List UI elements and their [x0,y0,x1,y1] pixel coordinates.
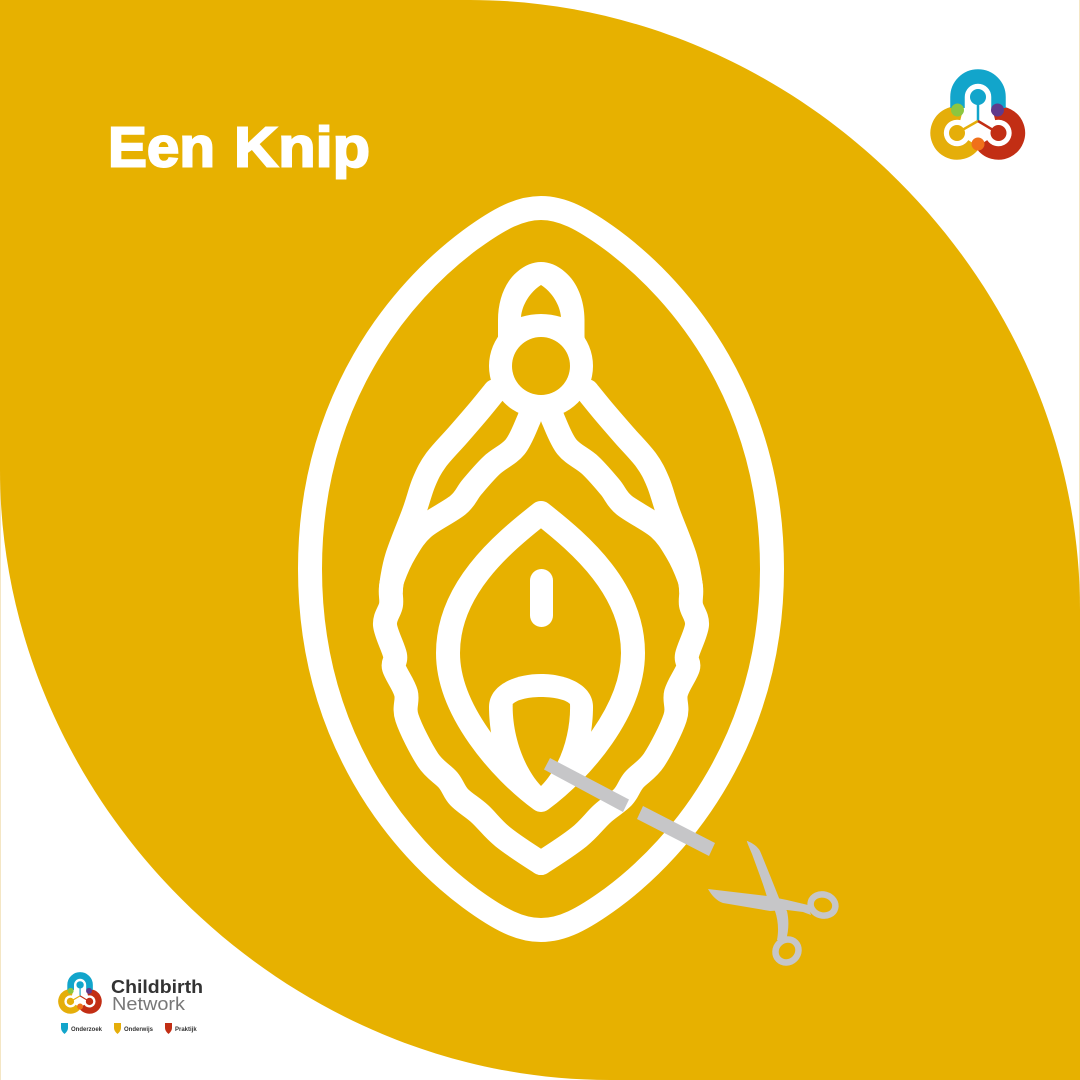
inner leaf [448,513,633,800]
logo: top right [937,76,1018,153]
title [108,116,370,180]
legend: Onderwijs [114,1023,154,1034]
legend: Onderzoek: Onderzoek [71,1027,103,1033]
legend: Praktijk: Praktijk [175,1027,197,1033]
icon: anatomy line drawing [310,208,772,930]
legend: Onderzoek [61,1023,103,1034]
opening [489,674,593,805]
brand block: Childbirth Network [61,975,203,1034]
hood and ring [489,262,593,418]
left and right folds [385,391,697,863]
brand name: Childbirth [111,976,203,997]
title: Een [108,116,215,180]
slit [530,580,553,616]
cut line: grey incision bars [544,758,715,856]
legend: Onderwijs: Onderwijs [124,1027,154,1033]
icon: scissors [708,841,838,967]
scissor handle ring [808,892,838,918]
logo: small [61,975,99,1011]
scissor handle ring [771,935,803,967]
outer contour [310,208,772,930]
legend: Praktijk [165,1023,197,1034]
title: Knip [234,116,370,180]
brand subtitle: Network [112,994,186,1014]
